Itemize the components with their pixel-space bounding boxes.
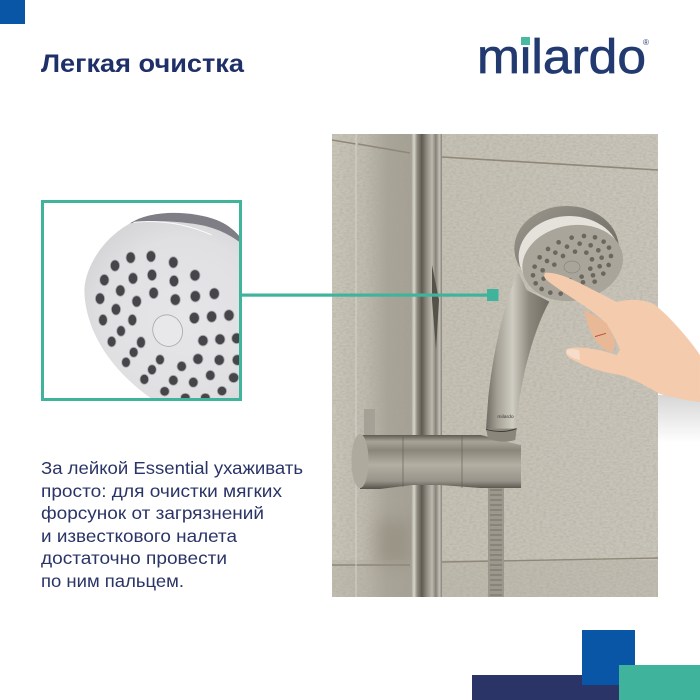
curled finger bbox=[584, 310, 615, 352]
body text: по ним пальцем. bbox=[41, 571, 184, 591]
body text: За лейкой Essential ухаживать bbox=[41, 458, 303, 478]
shower handle bbox=[486, 272, 549, 442]
logo: milardo: ® bbox=[643, 38, 649, 47]
title: Легкая очистка bbox=[41, 50, 245, 78]
hose bbox=[488, 485, 504, 597]
corner square: top left bbox=[0, 0, 25, 24]
inset frame bbox=[42, 202, 240, 400]
body text: и известкового налета bbox=[41, 526, 237, 546]
close-up shower head bbox=[84, 212, 239, 398]
shower handle: milardo bbox=[497, 414, 514, 420]
body text: форсунок от загрязнений bbox=[41, 503, 264, 523]
hand pointing at shower head bbox=[544, 273, 700, 402]
body text bbox=[41, 458, 303, 591]
logo: milardo: milardo bbox=[477, 31, 646, 84]
wall tiles bbox=[332, 134, 658, 597]
wall pin bbox=[364, 409, 375, 436]
shadow under hand bbox=[658, 395, 700, 443]
slide rail bbox=[411, 134, 442, 597]
callout line bbox=[242, 289, 498, 301]
inset: close-up of nozzles bbox=[41, 200, 263, 401]
corner blocks: bottom right bbox=[472, 630, 700, 700]
photo: shower on tiled wall bbox=[332, 134, 658, 597]
body text: просто: для очистки мягких bbox=[41, 481, 282, 501]
shower head bbox=[514, 206, 623, 301]
body text: достаточно провести bbox=[41, 548, 227, 568]
rail clamp bbox=[352, 434, 521, 489]
